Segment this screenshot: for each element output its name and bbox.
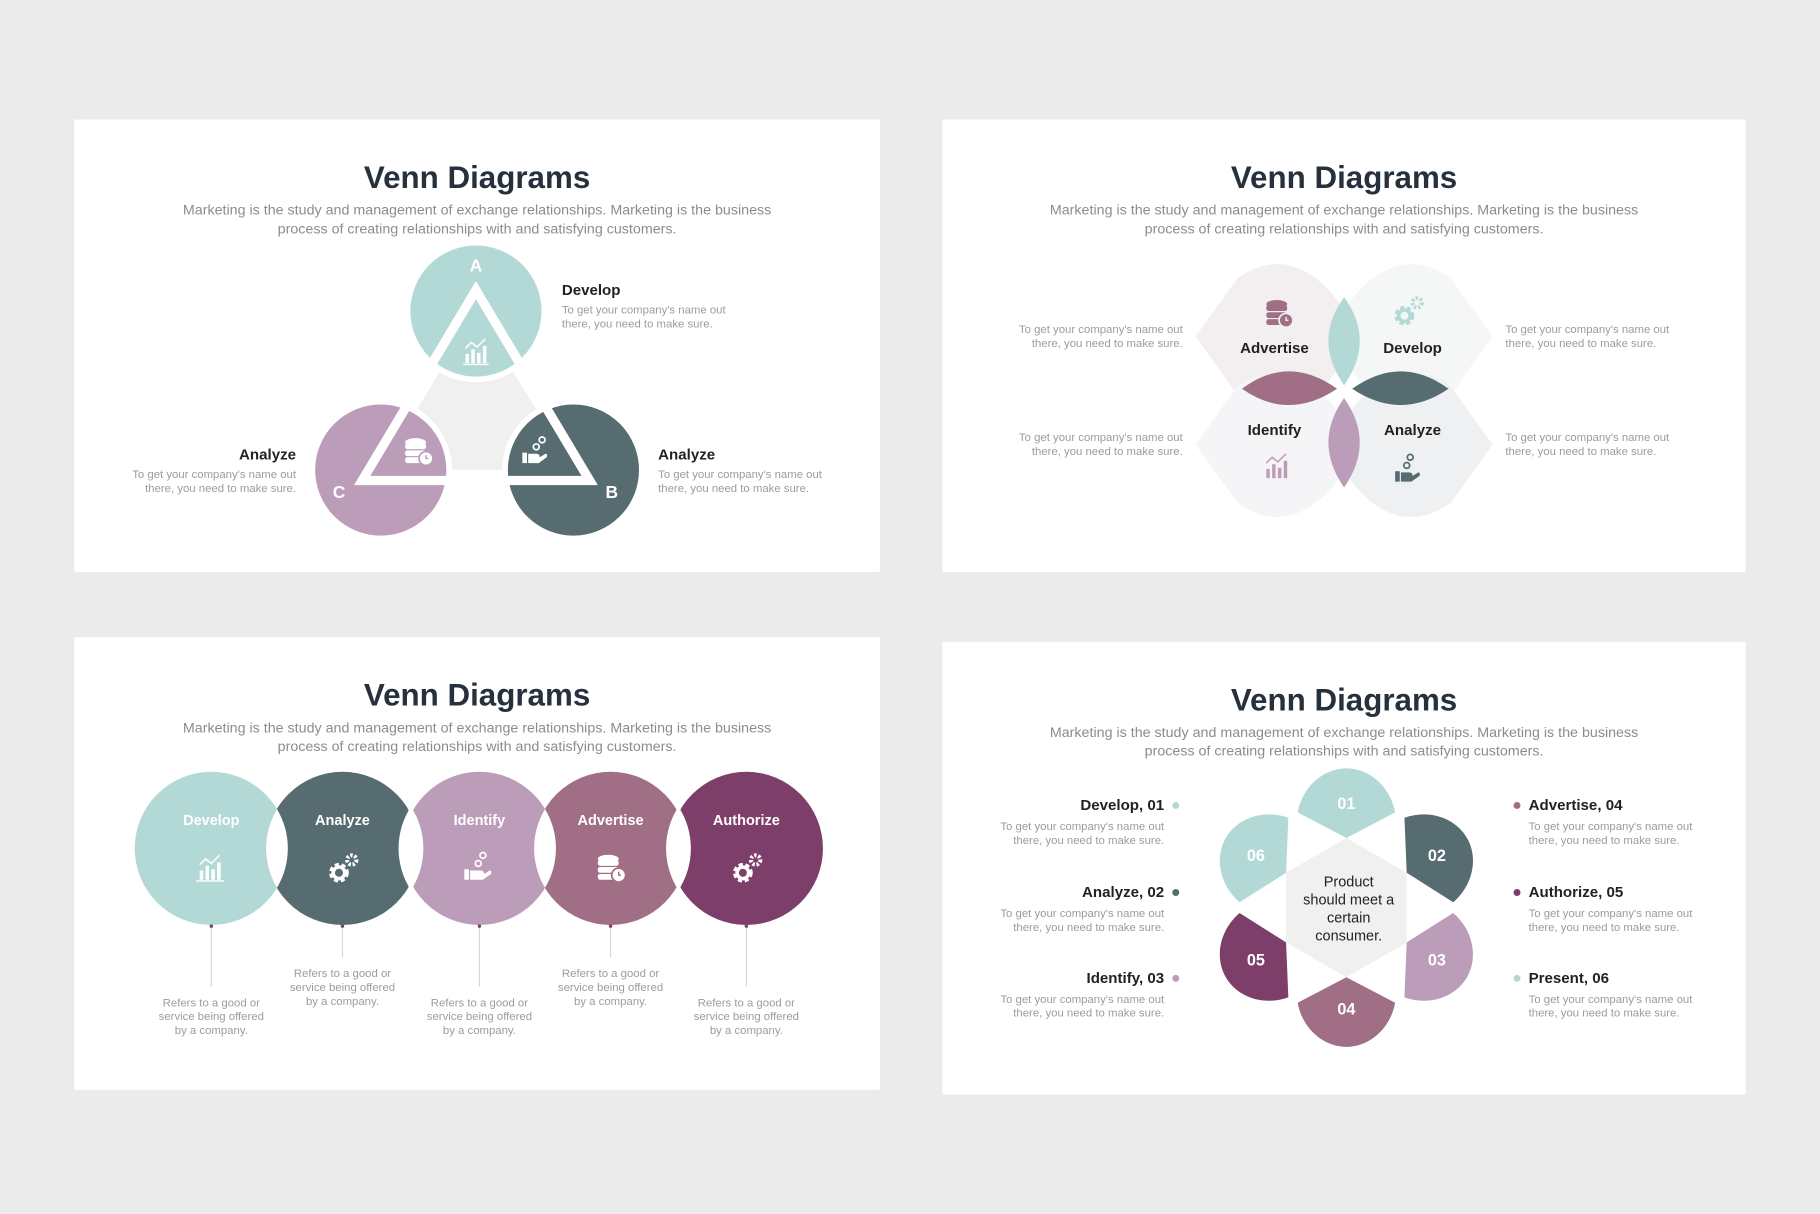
- letters: A: [470, 256, 483, 276]
- left labels: [1000, 797, 1165, 1020]
- icon: chart: [463, 339, 489, 364]
- side texts: there, you need to make sure.: [1032, 446, 1183, 458]
- label: develop: [562, 282, 726, 330]
- icon: hand coin: [1395, 454, 1420, 482]
- circle B: [505, 402, 642, 539]
- side texts: there, you need to make sure.: [1032, 338, 1183, 350]
- petal: develop: [1339, 264, 1493, 407]
- label: analyze right: Analyze: [658, 447, 715, 464]
- labels: Identify: [1248, 422, 1302, 439]
- descriptions: service being offered: [290, 982, 395, 994]
- subtitle: process of creating relationships with and satisfying customers.: [1145, 744, 1543, 760]
- icon: hand coin: [464, 852, 491, 880]
- icon: database: [1266, 300, 1293, 327]
- left labels: To get your company's name out: [1000, 908, 1165, 920]
- circle labels: Advertise: [578, 813, 644, 829]
- right labels: there, you need to make sure.: [1529, 835, 1680, 847]
- circle labels: Authorize: [713, 813, 780, 829]
- right labels: there, you need to make sure.: [1529, 922, 1680, 934]
- side texts: To get your company's name out: [1019, 432, 1184, 444]
- panel: triangle venn: [74, 120, 880, 572]
- icon: chart: [1266, 454, 1287, 478]
- petal numbers: 04: [1337, 1000, 1355, 1018]
- side texts: [1019, 324, 1670, 458]
- descriptions: by a company.: [710, 1025, 783, 1037]
- circle labels: [183, 813, 780, 829]
- lens: purple: [1328, 398, 1360, 487]
- white triangle outline: [362, 290, 590, 480]
- right labels: To get your company's name out: [1529, 908, 1693, 920]
- labels: [1240, 340, 1442, 439]
- connector lines: [211, 925, 746, 987]
- labels: Advertise: [1240, 340, 1309, 357]
- petal numbers: 06: [1247, 847, 1265, 865]
- right labels: there, you need to make sure.: [1529, 1008, 1680, 1020]
- title: Venn Diagrams: [364, 678, 590, 713]
- icon: database: [598, 855, 626, 882]
- subtitle: process of creating relationships with and satisfying customers.: [1145, 221, 1543, 237]
- icon: gears: [332, 855, 356, 880]
- panel: five circles: [74, 637, 880, 1090]
- petals: [1201, 768, 1491, 1047]
- label: analyze right: To get your company's name out: [658, 469, 823, 481]
- right labels: Present, 06: [1529, 970, 1609, 987]
- left labels: there, you need to make sure.: [1013, 922, 1164, 934]
- label: analyze left: there, you need to make sure.: [145, 483, 296, 495]
- label: analyze right: [658, 447, 823, 495]
- subtitle: Marketing is the study and management of exchange relationships. Marketing is the business: [1050, 203, 1638, 219]
- lens: dark: [1352, 371, 1449, 405]
- center text: Product: [1324, 875, 1374, 891]
- label: analyze left: To get your company's name out: [132, 469, 297, 481]
- petal numbers: 03: [1428, 952, 1446, 970]
- right labels: To get your company's name out: [1529, 821, 1693, 833]
- lens: teal: [1328, 297, 1360, 385]
- descriptions: service being offered: [159, 1011, 264, 1023]
- side texts: To get your company's name out: [1505, 432, 1670, 444]
- descriptions: service being offered: [558, 982, 663, 994]
- title: Venn Diagrams: [1231, 682, 1457, 717]
- descriptions: service being offered: [694, 1011, 799, 1023]
- label: analyze left: Analyze: [239, 447, 296, 464]
- label: develop: To get your company's name out: [562, 304, 726, 316]
- right labels: [1529, 797, 1693, 1020]
- white lenses: [266, 807, 691, 890]
- petal: advertise: [1196, 264, 1349, 407]
- descriptions: by a company.: [443, 1025, 516, 1037]
- petal: identify: [1196, 375, 1349, 517]
- descriptions: Refers to a good or: [698, 997, 795, 1009]
- center text: should meet a: [1303, 893, 1395, 909]
- descriptions: Refers to a good or: [431, 997, 528, 1009]
- descriptions: Refers to a good or: [294, 968, 391, 980]
- petal numbers: 05: [1247, 952, 1265, 970]
- label: develop: Develop: [562, 282, 620, 299]
- left labels: there, you need to make sure.: [1013, 1008, 1164, 1020]
- petal: analyze: [1339, 375, 1493, 517]
- left labels: Identify, 03: [1087, 970, 1164, 987]
- subtitle: Marketing is the study and management of exchange relationships. Marketing is the business: [183, 720, 771, 736]
- circle A: [407, 243, 544, 380]
- left labels: there, you need to make sure.: [1013, 835, 1164, 847]
- descriptions: Refers to a good or: [163, 997, 260, 1009]
- petal numbers: 01: [1337, 795, 1355, 813]
- circle labels: Analyze: [315, 813, 370, 829]
- petal numbers: [1247, 795, 1446, 1018]
- lens: mauve: [1242, 371, 1337, 405]
- circles: [135, 772, 288, 925]
- circle labels: Develop: [183, 813, 240, 829]
- center hexagon: [1286, 838, 1407, 977]
- descriptions: service being offered: [427, 1011, 532, 1023]
- side texts: there, you need to make sure.: [1505, 446, 1656, 458]
- title: Venn Diagrams: [1231, 160, 1457, 195]
- icon: gears: [736, 855, 760, 880]
- letters: B: [605, 482, 618, 502]
- left labels: To get your company's name out: [1000, 821, 1165, 833]
- descriptions: by a company.: [306, 996, 379, 1008]
- side texts: To get your company's name out: [1019, 324, 1184, 336]
- subtitle: process of creating relationships with and satisfying customers.: [278, 739, 677, 755]
- center text: certain: [1327, 911, 1370, 927]
- descriptions: by a company.: [574, 996, 647, 1008]
- circle labels: Identify: [454, 813, 505, 829]
- gray center: [381, 311, 573, 470]
- subtitle: process of creating relationships with and satisfying customers.: [278, 221, 677, 237]
- right dots: [1514, 802, 1520, 982]
- side texts: there, you need to make sure.: [1505, 338, 1656, 350]
- panel: flower: [942, 642, 1746, 1094]
- left dots: [1172, 802, 1179, 982]
- icon: chart: [196, 855, 224, 881]
- descriptions: Refers to a good or: [562, 968, 659, 980]
- left labels: Develop, 01: [1080, 797, 1164, 814]
- right labels: To get your company's name out: [1529, 994, 1693, 1006]
- subtitle: Marketing is the study and management of exchange relationships. Marketing is the business: [183, 203, 771, 219]
- right labels: Authorize, 05: [1529, 884, 1623, 901]
- right labels: Advertise, 04: [1529, 797, 1623, 814]
- descriptions: [159, 968, 799, 1037]
- letters: [333, 256, 618, 502]
- labels: Develop: [1383, 340, 1442, 357]
- label: develop: there, you need to make sure.: [562, 318, 713, 330]
- letters: C: [333, 482, 346, 502]
- icon: database: [405, 438, 433, 465]
- icon: gears: [1397, 298, 1422, 323]
- panel: four-petal venn: [942, 120, 1746, 572]
- label: analyze right: there, you need to make sure.: [658, 483, 809, 495]
- side texts: To get your company's name out: [1505, 324, 1670, 336]
- center text: consumer.: [1315, 929, 1382, 945]
- circle C: [312, 402, 449, 539]
- labels: Analyze: [1384, 422, 1441, 439]
- petal numbers: 02: [1428, 847, 1446, 865]
- label: analyze left: [132, 447, 297, 495]
- icon: hand coin: [522, 437, 547, 463]
- left labels: Analyze, 02: [1082, 884, 1164, 901]
- dots: [210, 924, 748, 928]
- title: Venn Diagrams: [364, 160, 590, 195]
- descriptions: by a company.: [175, 1025, 248, 1037]
- left labels: To get your company's name out: [1000, 994, 1165, 1006]
- subtitle: Marketing is the study and management of exchange relationships. Marketing is the business: [1050, 725, 1638, 741]
